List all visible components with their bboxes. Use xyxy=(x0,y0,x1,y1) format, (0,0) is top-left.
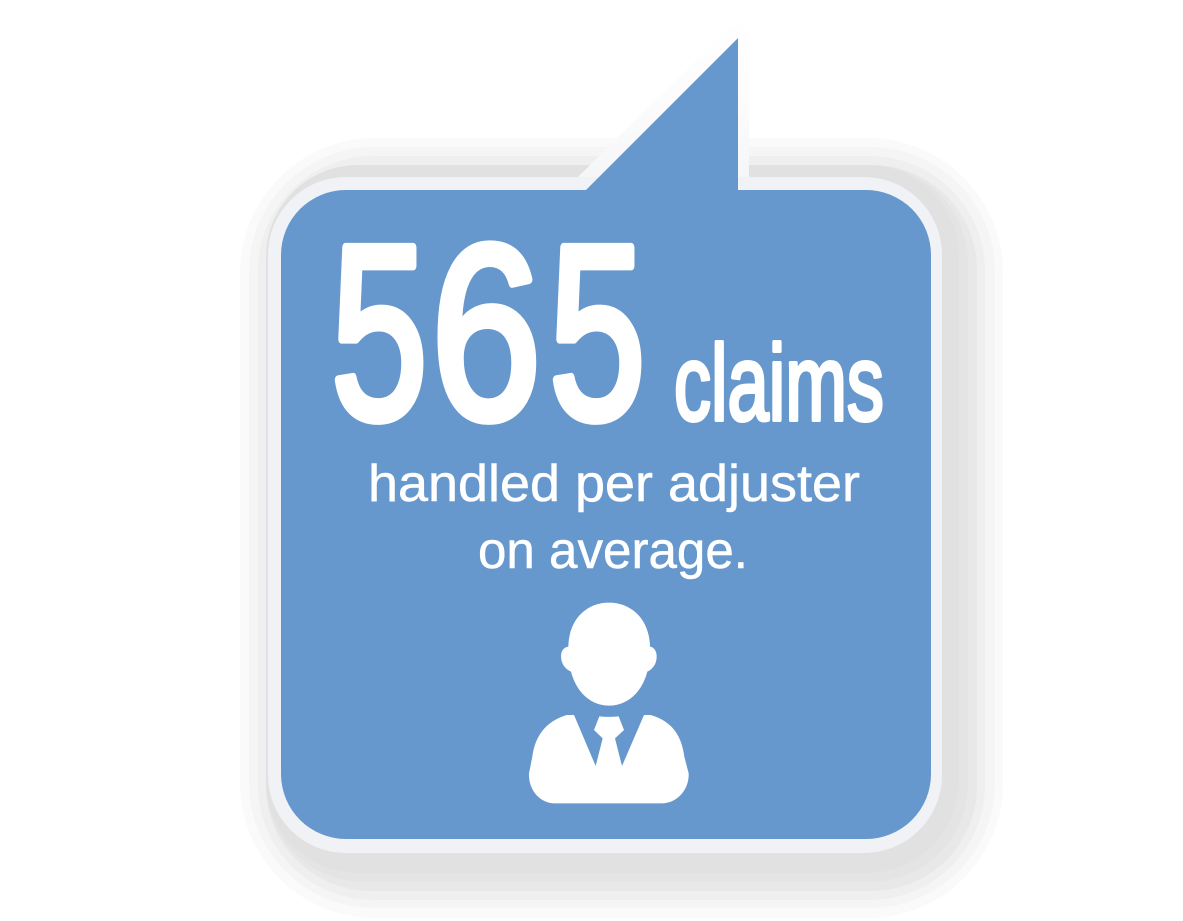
big number 565 xyxy=(331,194,646,471)
big number 565: 5 xyxy=(331,194,428,471)
text: on average.: on average. xyxy=(478,522,748,580)
big number 565: 5 xyxy=(549,194,646,471)
word: claims: claims xyxy=(674,322,884,443)
icon: head xyxy=(561,603,657,706)
text: handled per adjuster: handled per adjuster xyxy=(368,455,860,513)
icon: suit body xyxy=(529,715,689,803)
bubble drop shadow xyxy=(240,138,1003,918)
icon: person in suit and tie xyxy=(529,603,689,803)
bubble blue panel with pointer xyxy=(281,38,931,839)
big number 565: 6 xyxy=(431,194,541,471)
bubble white border xyxy=(268,18,942,853)
